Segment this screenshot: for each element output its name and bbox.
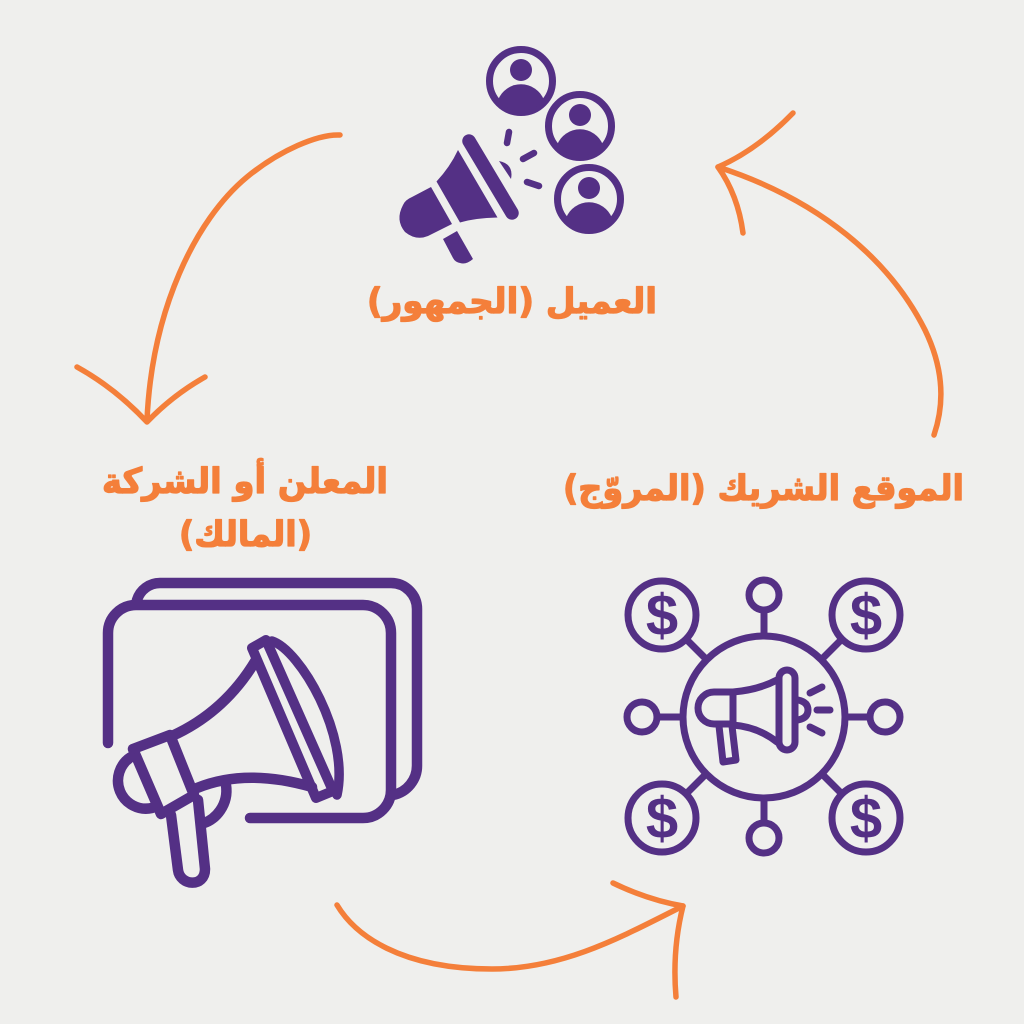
icon: network of money around a megaphone: $ xyxy=(646,583,678,648)
icon: megaphone with audience xyxy=(399,50,620,264)
arrow: customer to owner xyxy=(77,135,340,422)
icon: network of money around a megaphone: $ xyxy=(850,583,882,648)
icon: network of money around a megaphone xyxy=(627,580,900,853)
arrow: owner to partner xyxy=(337,883,683,997)
icon: megaphone on stacked cards xyxy=(108,583,417,883)
arrow: partner to customer xyxy=(718,113,941,435)
label: partner site (promoter): الموقع الشريك (المروّج) xyxy=(563,469,964,509)
label: owner: (المالك) xyxy=(179,515,312,555)
icon: network of money around a megaphone: $ xyxy=(646,786,678,851)
label: advertiser or company: المعلن أو الشركة xyxy=(102,458,388,502)
label: customer (audience): العميل (الجمهور) xyxy=(367,282,657,322)
icon: network of money around a megaphone: $ xyxy=(850,786,882,851)
